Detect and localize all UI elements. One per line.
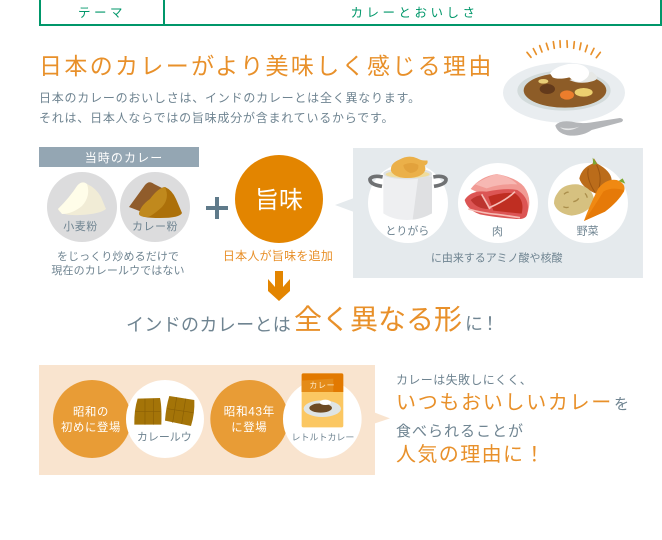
header table: theme: カレーとおいしさ bbox=[350, 6, 479, 20]
header table: theme bbox=[40, 0, 661, 25]
closing text: いつもおいしいカレー bbox=[396, 392, 613, 414]
heading band: 当時のカレー bbox=[85, 151, 163, 165]
panel caption: に由来するアミノ酸や核酸 bbox=[431, 251, 562, 265]
icon: wheat flour: 小麦粉 bbox=[63, 220, 98, 233]
icon: curry roux: カレールウ bbox=[137, 430, 192, 443]
icon: curry powder: カレー粉 bbox=[132, 220, 178, 233]
icon: curry plate bbox=[503, 41, 625, 136]
closing text: カレーは失敗しにくく、 bbox=[396, 372, 532, 387]
intro text: 日本のカレーのおいしさは、インドのカレーとは全く異なります。 bbox=[39, 91, 421, 105]
badge: Showa 43: 昭和43年 bbox=[224, 405, 275, 419]
icon: wheat flour bbox=[47, 172, 117, 242]
panel: umami sources bbox=[335, 148, 643, 278]
title: 日本のカレーがより美味しく感じる理由 bbox=[39, 53, 494, 79]
icon: chicken stock pot bbox=[370, 157, 446, 237]
icon: retort curry pack: レトルトカレー bbox=[292, 432, 354, 442]
icon: vegetables bbox=[554, 158, 625, 237]
conclusion headline: に！ bbox=[465, 314, 497, 334]
closing text: 食べられることが bbox=[396, 423, 524, 440]
panel: curry of the time bbox=[39, 147, 199, 277]
badge: Showa 43: に登場 bbox=[231, 420, 267, 434]
icon: meat bbox=[465, 174, 529, 238]
note text bbox=[51, 250, 185, 277]
note text: をじっくり炒めるだけで bbox=[57, 250, 179, 263]
panel: popular products bbox=[39, 365, 390, 475]
umami circle: 旨味 bbox=[255, 187, 303, 214]
badge: early Showa bbox=[53, 380, 131, 458]
conclusion headline: インドのカレーとは bbox=[126, 315, 291, 335]
intro text bbox=[39, 91, 421, 125]
badge: Showa 43 bbox=[210, 380, 288, 458]
icon: meat: 肉 bbox=[492, 225, 503, 238]
closing text bbox=[396, 372, 629, 466]
closing text: 人気の理由に！ bbox=[396, 443, 546, 466]
conclusion headline: 全く異なる形 bbox=[294, 304, 462, 335]
icon: chicken stock pot: とりがら bbox=[385, 223, 429, 237]
heading band bbox=[39, 147, 199, 167]
note text: 現在のカレールウではない bbox=[51, 264, 185, 277]
badge: early Showa: 昭和の bbox=[73, 406, 109, 419]
umami caption: 日本人が旨味を追加 bbox=[223, 248, 333, 263]
closing text: を bbox=[614, 396, 629, 413]
arrow: down bbox=[268, 271, 290, 301]
umami circle bbox=[235, 155, 323, 243]
icon: plus bbox=[206, 197, 228, 219]
icon: retort curry pack bbox=[283, 373, 362, 458]
header table: theme: テーマ bbox=[78, 6, 126, 20]
icon: curry roux bbox=[126, 380, 204, 458]
icon: vegetables: 野菜 bbox=[577, 224, 599, 237]
icon: retort curry pack: カレー bbox=[309, 381, 335, 390]
badge: early Showa: 初めに登場 bbox=[61, 420, 121, 434]
intro text: それは、日本人ならではの旨味成分が含まれているからです。 bbox=[39, 110, 394, 125]
icon: curry powder bbox=[120, 172, 190, 242]
